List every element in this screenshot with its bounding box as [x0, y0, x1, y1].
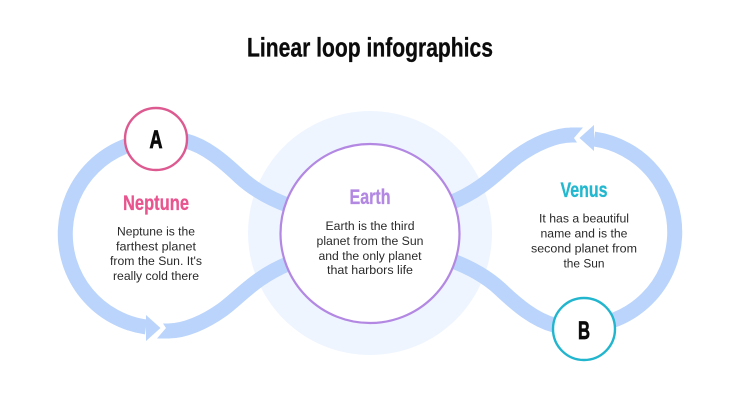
Venus description: second planet from — [531, 242, 637, 256]
Earth description — [316, 219, 424, 277]
Earth description: planet from the Sun — [316, 234, 424, 248]
Neptune description: from the Sun. It's — [110, 254, 202, 268]
Venus description: the Sun — [564, 256, 605, 270]
Neptune description — [110, 224, 202, 283]
Neptune text block — [110, 192, 202, 283]
Earth description: and the only planet — [318, 249, 422, 263]
Earth description: that harbors life — [327, 263, 413, 277]
center circle: Earth — [280, 144, 460, 323]
Neptune description: farthest planet — [116, 240, 197, 254]
right loop arrow — [450, 125, 675, 326]
Neptune description: really cold there — [113, 269, 199, 283]
Neptune description: Neptune is the — [117, 224, 195, 238]
left loop arrow — [65, 140, 290, 341]
Venus description — [531, 212, 637, 270]
badge B — [553, 298, 615, 360]
Venus heading: Venus — [560, 179, 608, 202]
badge A — [125, 108, 187, 170]
Earth text block — [316, 186, 424, 277]
center halo — [248, 111, 492, 355]
Earth heading: Earth — [350, 186, 390, 209]
Venus text block — [531, 179, 637, 270]
badge B: B — [578, 317, 590, 345]
Venus description: name and is the — [540, 226, 628, 240]
Venus description: It has a beautiful — [539, 212, 629, 226]
Earth description: Earth is the third — [326, 219, 415, 233]
Neptune heading: Neptune — [123, 192, 189, 215]
title: Linear loop infographics — [247, 32, 493, 62]
badge A: A — [150, 126, 162, 154]
